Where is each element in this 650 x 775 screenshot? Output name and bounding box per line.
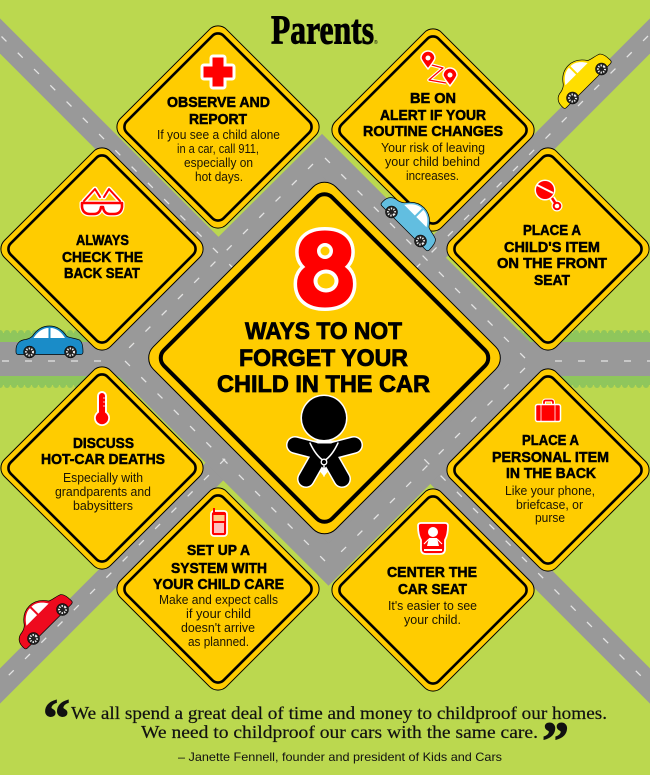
heading: PLACE A xyxy=(523,223,581,239)
text: Your risk of leaving xyxy=(381,141,485,155)
panel: set up a system xyxy=(112,483,324,695)
attribution: – Janette Fennell, founder and president of Kids and Cars xyxy=(178,750,502,764)
text xyxy=(55,471,151,513)
text xyxy=(505,484,595,525)
hedges along horizontal road xyxy=(0,333,650,385)
heading: DISCUSS xyxy=(73,436,134,452)
heading: BACK SEAT xyxy=(64,266,140,282)
text: grandparents and xyxy=(55,485,151,499)
text xyxy=(388,599,477,627)
heading: ON THE FRONT xyxy=(497,256,607,272)
heading: ALWAYS xyxy=(76,233,129,249)
title: WAYS TO NOT xyxy=(245,318,402,345)
text: your child behind xyxy=(385,155,480,169)
icon: glasses xyxy=(82,189,122,214)
car: red xyxy=(6,582,76,652)
text xyxy=(381,141,485,183)
heading xyxy=(492,433,609,482)
heading xyxy=(387,565,477,598)
numeral 8: 8 xyxy=(298,214,352,324)
heading: CHILD'S ITEM xyxy=(504,240,600,256)
heading: OBSERVE AND xyxy=(167,95,270,111)
icon: phone xyxy=(211,508,227,536)
text: increases. xyxy=(406,169,459,183)
text: Like your phone, xyxy=(505,484,595,498)
heading: REPORT xyxy=(189,112,247,128)
text xyxy=(157,128,280,184)
logo: Parents: ® xyxy=(374,39,378,46)
panel: place a child's item xyxy=(442,143,650,355)
icon: map pins and route xyxy=(421,51,457,86)
quote text: We all spend a great deal of time and money to childproof our homes. xyxy=(71,703,607,723)
heading xyxy=(363,91,503,140)
panel: center the car seat xyxy=(327,484,539,696)
heading: PERSONAL ITEM xyxy=(492,450,609,466)
icon: red cross xyxy=(204,58,232,86)
panel: be on alert xyxy=(327,24,539,236)
text: Make and expect calls xyxy=(159,593,278,607)
heading xyxy=(497,223,607,289)
text: your child. xyxy=(404,613,461,627)
panel: place a personal item xyxy=(442,364,650,576)
heading: YOUR CHILD CARE xyxy=(153,577,284,593)
text: hot days. xyxy=(195,170,243,184)
heading: ROUTINE CHANGES xyxy=(363,124,503,140)
icon: rattle xyxy=(534,180,562,212)
heading: CHECK THE xyxy=(62,250,143,266)
heading: SYSTEM WITH xyxy=(171,561,267,577)
text: babysitters xyxy=(73,499,133,513)
heading: CENTER THE xyxy=(387,565,477,581)
text: briefcase, or xyxy=(516,498,583,512)
heading: SET UP A xyxy=(187,543,250,559)
panel: observe and report xyxy=(112,21,324,233)
heading: CAR SEAT xyxy=(398,582,467,598)
panel: always check the back seat xyxy=(0,143,208,355)
numeral 8: 8 xyxy=(298,214,352,324)
title: FORGET YOUR xyxy=(239,345,408,372)
text: if your child xyxy=(186,607,251,621)
heading: HOT-CAR DEATHS xyxy=(41,452,165,468)
text: Especially with xyxy=(63,471,143,485)
text: purse xyxy=(535,511,565,525)
logo: Parents: Parents xyxy=(271,6,374,52)
car: yellow xyxy=(545,42,615,112)
text: If you see a child alone xyxy=(157,128,280,142)
heading xyxy=(153,543,284,593)
panel: discuss hot-car deaths xyxy=(0,362,208,574)
text: as planned. xyxy=(188,635,249,649)
text xyxy=(159,593,278,649)
icon: baby xyxy=(295,394,354,479)
title: CHILD IN THE CAR xyxy=(217,371,430,398)
quote text: We need to childproof our cars with the same care. xyxy=(141,722,538,742)
text: especially on xyxy=(184,156,253,170)
car: dark blue xyxy=(16,326,83,358)
icon: thermometer xyxy=(94,396,110,426)
title xyxy=(217,318,430,398)
opening quotation mark: “ xyxy=(43,688,70,748)
closing quotation mark: ” xyxy=(542,711,569,771)
quote text xyxy=(71,703,607,742)
heading xyxy=(62,233,143,282)
panel: central title sign xyxy=(142,176,507,540)
heading xyxy=(41,436,165,468)
icon: suitcase xyxy=(536,400,560,422)
car: light blue xyxy=(378,184,448,254)
text: It's easier to see xyxy=(388,599,477,613)
heading: BE ON xyxy=(410,91,456,107)
heading xyxy=(167,95,270,128)
heading: ALERT IF YOUR xyxy=(380,108,487,124)
quote xyxy=(43,688,607,771)
heading: SEAT xyxy=(534,273,570,289)
heading: IN THE BACK xyxy=(506,466,596,482)
text: doesn't arrive xyxy=(181,621,255,635)
icon: car seat xyxy=(418,523,448,554)
heading: PLACE A xyxy=(522,433,579,449)
text: in a car, call 911, xyxy=(177,142,259,156)
